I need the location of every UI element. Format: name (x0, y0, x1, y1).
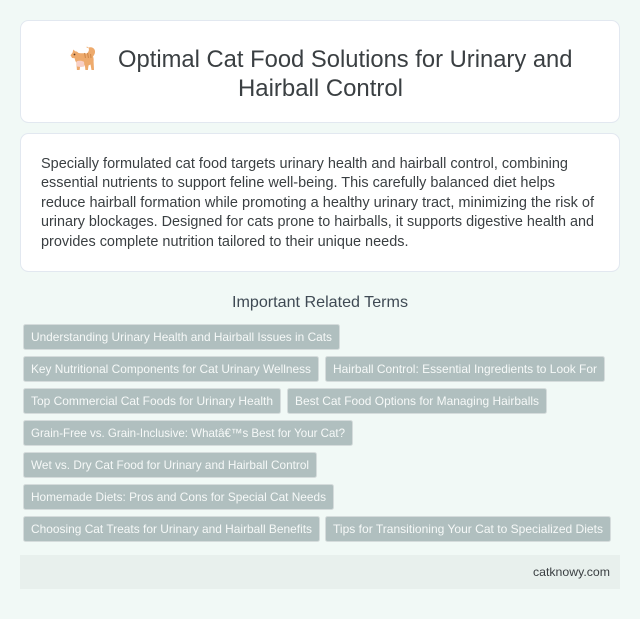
description text: Specially formulated cat food targets urinary health and hairball control, combining (41, 155, 568, 172)
tag (24, 516, 320, 542)
tag (24, 356, 318, 382)
description text: provides complete nutrition tailored to their unique needs. (41, 233, 408, 250)
tag: Homemade Diets: Pros and Cons for Special Cat Needs (31, 490, 326, 504)
tag (24, 484, 334, 510)
description text: urinary blockages. Designed for cats prone to hairballs, it supports digestive health and (41, 213, 594, 230)
title: Hairball Control (238, 75, 403, 102)
tag (24, 324, 340, 350)
tag (24, 452, 316, 478)
tag: Tips for Transitioning Your Cat to Specialized Diets (333, 522, 603, 536)
tag: Grain-Free vs. Grain-Inclusive: Whatâ€™s Best for Your Cat? (31, 426, 345, 440)
title: Optimal Cat Food Solutions for Urinary and (118, 46, 572, 73)
tag: Understanding Urinary Health and Hairball Issues in Cats (31, 330, 332, 344)
tag: Top Commercial Cat Foods for Urinary Health (31, 394, 273, 408)
description text: essential nutrients to support feline well-being. This carefully balanced diet helps (41, 174, 555, 191)
tag (24, 388, 280, 414)
tag (24, 420, 352, 446)
tag (326, 356, 604, 382)
tag: Key Nutritional Components for Cat Urinary Wellness (31, 362, 311, 376)
panel: title card (20, 20, 620, 122)
tag (326, 516, 610, 542)
footer text: catknowy.com (533, 565, 610, 579)
heading: important related terms: Important Related Terms (232, 294, 408, 311)
panel: description (20, 134, 620, 272)
tag: Choosing Cat Treats for Urinary and Hairball Benefits (31, 522, 312, 536)
tag: Wet vs. Dry Cat Food for Urinary and Hairball Control (31, 458, 309, 472)
tag (288, 388, 546, 414)
icon: cat (71, 47, 95, 70)
tag group: related terms (24, 324, 610, 542)
footer (20, 555, 620, 589)
description text: reduce hairball formation while promoting a healthy urinary tract, minimizing the risk of (41, 194, 595, 211)
tag: Best Cat Food Options for Managing Hairballs (295, 394, 539, 408)
tag: Hairball Control: Essential Ingredients to Look For (333, 362, 597, 376)
title (118, 46, 572, 102)
description text (41, 155, 595, 250)
